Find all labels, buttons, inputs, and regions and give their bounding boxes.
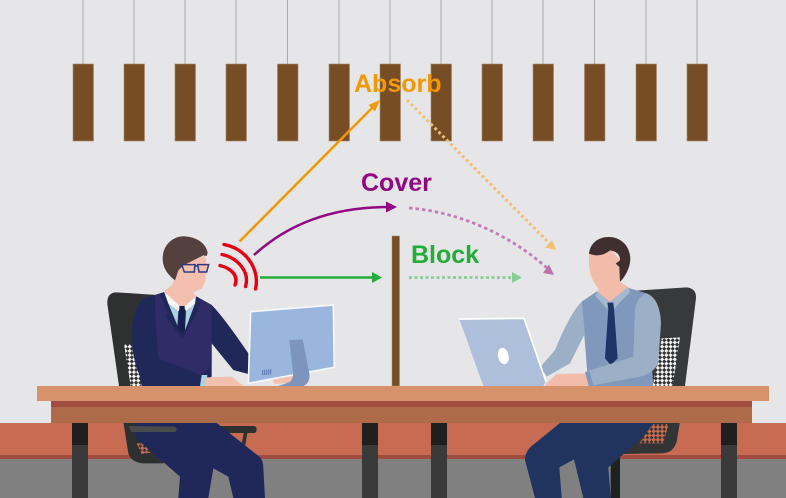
arrow: absorb reflected [407,100,556,250]
right man lower body and chair [525,422,680,498]
monitor vents [263,369,271,375]
sound waves icon [220,244,256,289]
neck and face [163,255,207,310]
table [51,400,752,423]
left man lower body and chair [123,422,265,498]
vest [155,292,212,375]
near arm [586,293,661,386]
monitor back hand [272,376,293,384]
cuff [585,371,593,386]
laptop edge [459,318,546,382]
label: Block: Block [411,241,479,269]
arrow: absorb [240,100,380,242]
table top [37,386,769,401]
hair [163,236,208,280]
arrow: cover reflected [409,208,554,275]
hand [546,373,588,386]
floor [0,459,786,498]
cuff [200,375,207,386]
table legs [72,423,737,498]
collar [164,291,196,311]
tie [178,306,185,334]
arrow: cover [254,202,397,255]
collar [595,287,630,309]
jacket [132,292,248,386]
shirt [168,304,195,330]
neck and face [589,248,628,302]
arrow: block [260,272,382,283]
glasses [182,265,209,272]
hand [205,377,243,386]
laptop logo [496,347,510,365]
laptop [459,318,546,386]
stand upper [287,339,309,386]
monitor screen [248,305,334,383]
ceiling acoustic panels [73,0,708,141]
office chair back [637,287,696,386]
back wall band [0,423,786,459]
vest [582,287,653,386]
chair mesh [653,337,680,386]
lapels [160,292,201,339]
right office worker [459,237,696,386]
label: Cover: Cover [361,169,432,197]
far arm [541,302,585,377]
office chair back [107,292,157,386]
hair [589,237,630,282]
chair mesh [124,344,142,386]
tie [605,303,618,365]
arrow: block reflected [409,272,522,283]
label: Absorb: Absorb [354,70,442,98]
monitor stand base [278,339,309,386]
left office worker [107,236,334,386]
partition [392,236,400,386]
